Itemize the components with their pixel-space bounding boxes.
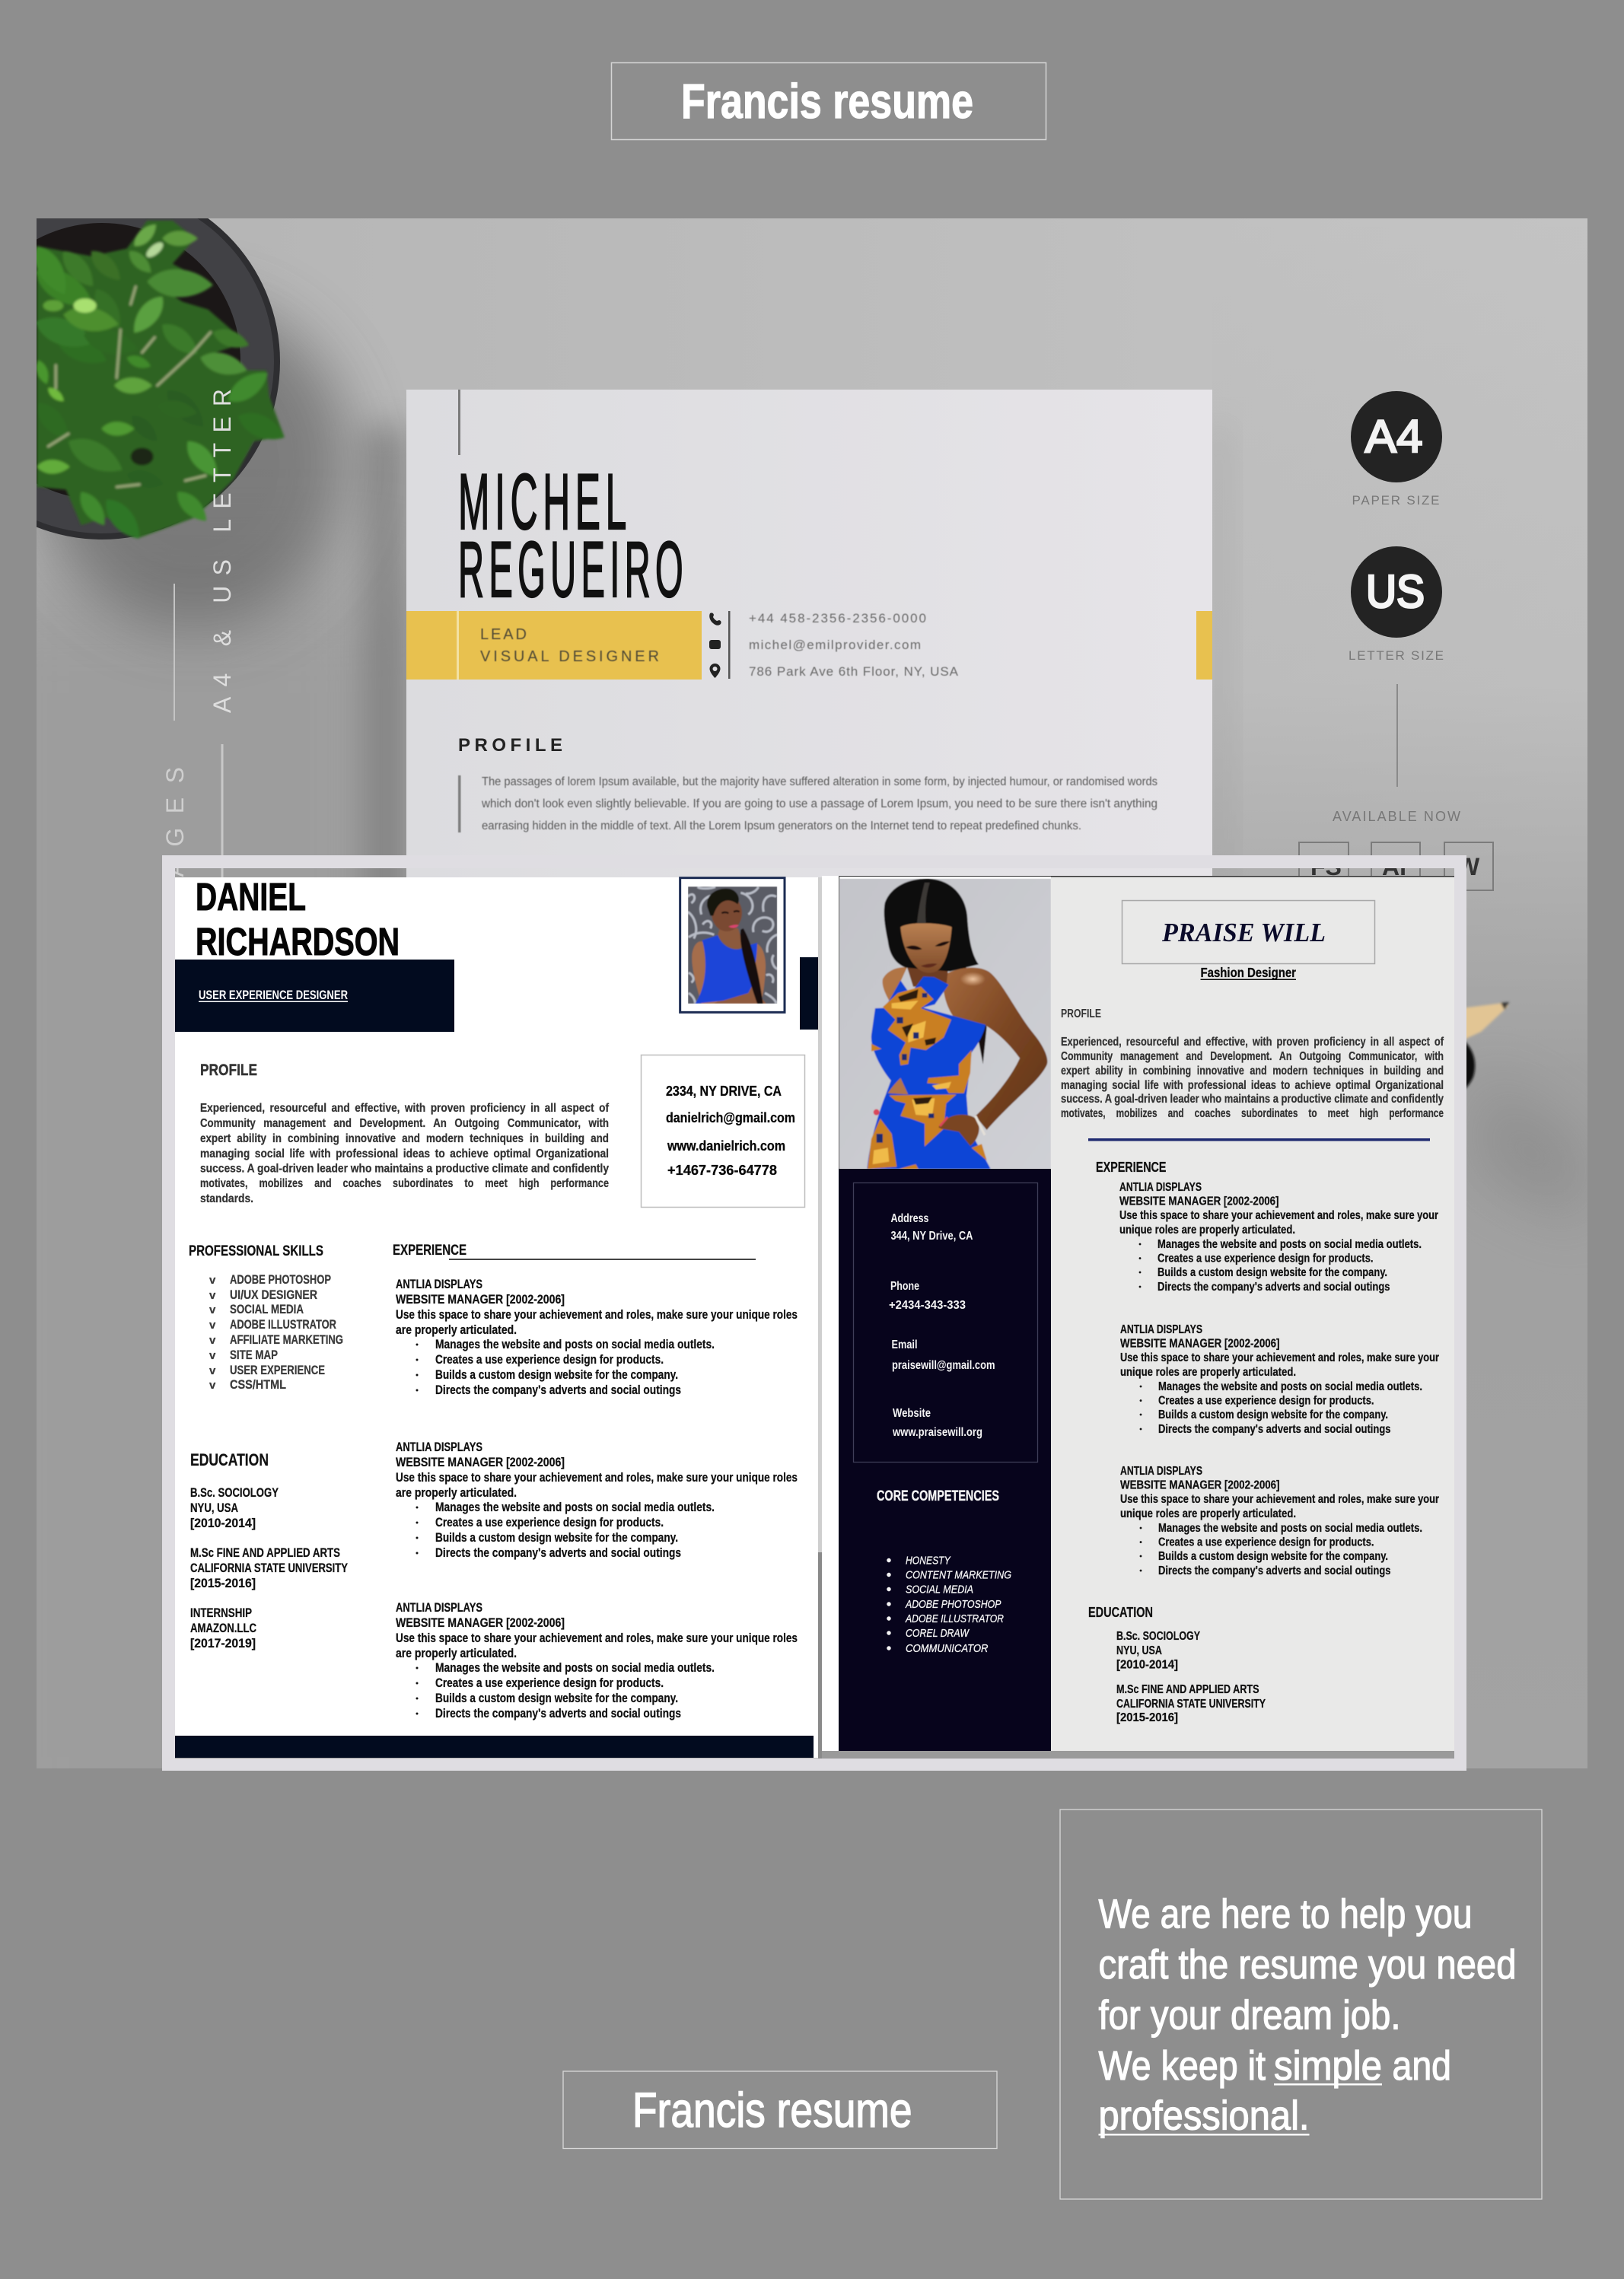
profile paragraph: motivates, mobilizes and coaches subordinates to meet high performance <box>1061 1107 1444 1120</box>
professional skills list: AFFILIATE MARKETING <box>230 1333 343 1347</box>
experience entry 1: Manages the website and posts on social media outlets. <box>1157 1238 1422 1251</box>
vertical caption: A4 & US LETTER: A4 & US LETTER <box>209 389 236 713</box>
experience entry 2: Manages the website and posts on social media outlets. <box>1158 1380 1422 1393</box>
sample name <box>460 473 682 598</box>
strip between resumes <box>818 876 1454 1759</box>
experience entry 1: Creates a use experience design for products. <box>435 1352 664 1367</box>
profile paragraph: success. A goal-driven leader who maintains a productive climate and confidently <box>1061 1093 1444 1106</box>
sidebar contact box: +2434-343-333 <box>889 1299 966 1312</box>
experience entry 3: Builds a custom design website for the company. <box>1158 1550 1388 1563</box>
education list: [2010-2014] <box>1116 1659 1178 1671</box>
experience entry 3: Use this space to share your achievement and roles, make sure your unique roles <box>396 1631 798 1645</box>
experience entry 3: Manages the website and posts on social media outlets. <box>1158 1522 1422 1535</box>
yellow job title band: LEAD <box>480 626 527 643</box>
core competencies list: ADOBE PHOTOSHOP <box>905 1598 1001 1611</box>
navy footer bar <box>175 1736 814 1758</box>
tagline box <box>1060 1810 1542 2199</box>
core competencies list: CONTENT MARKETING <box>906 1569 1011 1581</box>
core competencies list: CORE COMPETENCIES <box>877 1488 999 1504</box>
contact box: danielrich@gmail.com <box>666 1110 795 1125</box>
sample profile text: which don't look even slightly believable. If you are going to use a passage of Lorem Ipsum, you need to be sure there isn't anything <box>481 797 1157 810</box>
tagline box: and <box>1393 2043 1451 2089</box>
title box: Francis resume: Francis resume <box>681 74 973 129</box>
experience entry 1: WEBSITE MANAGER [2002-2006] <box>396 1292 565 1307</box>
mockup backdrop <box>0 218 1587 1872</box>
badge: A4 paper size: PAPER SIZE <box>1352 493 1440 508</box>
experience entry 3: ANTLIA DISPLAYS <box>1120 1465 1202 1478</box>
experience heading: EXPERIENCE <box>393 1242 467 1259</box>
education list: M.Sc FINE AND APPLIED ARTS <box>1116 1683 1259 1696</box>
core competencies list <box>877 1488 1011 1655</box>
experience entry 2: Creates a use experience design for products. <box>1158 1395 1374 1408</box>
software format boxes <box>1299 842 1493 890</box>
experience entry 2: Builds a custom design website for the company. <box>1158 1408 1388 1421</box>
education list: AMAZON.LLC <box>190 1621 256 1635</box>
education list: NYU, USA <box>1116 1644 1162 1657</box>
experience entry 3: Manages the website and posts on social media outlets. <box>435 1660 715 1675</box>
experience entry 3 <box>396 1600 798 1720</box>
experience entry 1 <box>396 1277 798 1397</box>
experience entry 1: Creates a use experience design for products. <box>1157 1252 1373 1265</box>
vertical rule right <box>221 744 224 877</box>
core competencies list: ADOBE ILLUSTRATOR <box>905 1612 1004 1625</box>
sidebar contact box: Email <box>892 1338 918 1351</box>
title box: Francis resume <box>612 62 1046 140</box>
experience entry 1: Use this space to share your achievement and roles, make sure your unique roles <box>396 1307 798 1322</box>
sidebar contact box: Phone <box>890 1280 919 1293</box>
experience entry 3: WEBSITE MANAGER [2002-2006] <box>396 1615 565 1630</box>
education list: [2017-2019] <box>190 1636 256 1650</box>
yellow job title band <box>406 611 1212 680</box>
experience entry 2 <box>396 1440 798 1560</box>
experience entry 1: Manages the website and posts on social media outlets. <box>435 1337 715 1351</box>
profile paragraph: expert ability in combining innovative and modern techniques in building and <box>200 1132 609 1145</box>
experience entry 3: ANTLIA DISPLAYS <box>396 1600 482 1615</box>
experience entry 1: ANTLIA DISPLAYS <box>396 1277 482 1291</box>
education list: CALIFORNIA STATE UNIVERSITY <box>1116 1698 1266 1711</box>
panel: resume Daniel Richardson <box>175 875 818 1758</box>
experience entry 3: are properly articulated. <box>396 1646 517 1660</box>
software format boxes: FS <box>1310 853 1342 880</box>
experience entry 1: are properly articulated. <box>396 1323 517 1337</box>
sample resume paper: Michel Regueiro: REGUEIRO <box>458 526 688 614</box>
experience entry 1: unique roles are properly articulated. <box>1119 1224 1295 1237</box>
experience entry 2: Directs the company's adverts and social outings <box>435 1545 681 1560</box>
experience entry 1 <box>1119 1181 1438 1294</box>
profile heading: PROFILE <box>1061 1007 1101 1020</box>
tagline box: professional. <box>1099 2093 1309 2138</box>
professional skills list: v <box>209 1349 216 1362</box>
education list: B.Sc. SOCIOLOGY <box>190 1485 279 1500</box>
experience entry 3: Builds a custom design website for the company. <box>435 1691 678 1705</box>
navy job title block <box>175 960 454 1032</box>
contact lines: 786 Park Ave 6th Floor, NY, USA <box>749 664 959 679</box>
core competencies list: COMMUNICATOR <box>906 1642 989 1655</box>
education list: NYU, USA <box>190 1501 238 1515</box>
experience entry 2: WEBSITE MANAGER [2002-2006] <box>1120 1338 1280 1351</box>
professional skills list: v <box>209 1334 216 1347</box>
vertical rule left <box>174 584 175 721</box>
profile paragraph: managing social life with professional ideas to achieve optimal Organizational <box>1061 1079 1444 1092</box>
profile paragraph: Experienced, resourceful and effective, with proven proficiency in all aspect of <box>200 1102 610 1115</box>
portrait photo <box>680 878 785 1012</box>
professional skills list: UI/UX DESIGNER <box>230 1288 317 1302</box>
contact box: www.danielrich.com <box>667 1138 785 1154</box>
experience entry 2: ANTLIA DISPLAYS <box>1120 1323 1202 1336</box>
contact lines: michel@emilprovider.com <box>749 638 921 652</box>
experience entry 2: Directs the company's adverts and social outings <box>1158 1423 1391 1436</box>
professional skills list: SOCIAL MEDIA <box>230 1303 304 1316</box>
navy sidebar <box>839 1169 1051 1751</box>
tagline box: craft the resume you need <box>1099 1942 1516 1988</box>
experience entry 2: Builds a custom design website for the company. <box>435 1530 678 1545</box>
experience entry 1: Builds a custom design website for the company. <box>1157 1266 1387 1279</box>
navy side tab <box>800 957 818 1030</box>
contact lines: +44 458-2356-2356-0000 <box>749 611 926 625</box>
name box <box>1122 901 1374 963</box>
profile paragraph: expert ability in combining innovative and modern techniques in building and <box>1061 1065 1444 1077</box>
tagline box: simple <box>1274 2043 1382 2089</box>
professional skills list: v <box>209 1319 216 1332</box>
experience entry 1: Builds a custom design website for the company. <box>435 1367 678 1382</box>
professional skills list: v <box>209 1379 216 1392</box>
experience entry 3: Use this space to share your achievement and roles, make sure your <box>1120 1493 1439 1506</box>
experience entry 3: Creates a use experience design for products. <box>1158 1536 1374 1549</box>
experience entry 1: Directs the company's adverts and social outings <box>435 1383 681 1397</box>
education list <box>1088 1605 1266 1724</box>
profile paragraph: Experienced, resourceful and effective, with proven proficiency in all aspect of <box>1061 1036 1444 1049</box>
education list: [2015-2016] <box>1116 1711 1178 1724</box>
tagline box: for your dream job. <box>1099 1992 1400 2038</box>
experience entry 2 <box>1120 1323 1439 1436</box>
sidebar contact box: Address <box>890 1212 928 1225</box>
footer label box: Francis resume: Francis resume <box>632 2083 912 2137</box>
job title: Fashion Designer <box>1201 965 1296 980</box>
badge divider <box>1396 684 1398 787</box>
education list: EDUCATION <box>1088 1605 1153 1620</box>
sidebar contact box: praisewill@gmail.com <box>892 1359 995 1372</box>
contact box: 2334, NY DRIVE, CA <box>666 1084 782 1099</box>
education list: B.Sc. SOCIOLOGY <box>1116 1630 1200 1643</box>
professional skills list: SITE MAP <box>230 1348 278 1362</box>
professional skills list: CSS/HTML <box>230 1378 286 1392</box>
experience entry 2: Use this space to share your achievement and roles, make sure your <box>1120 1351 1439 1364</box>
profile paragraph: standards. <box>200 1192 253 1205</box>
experience entry 3: Directs the company's adverts and social outings <box>1158 1564 1391 1577</box>
profile paragraph: managing social life with professional ideas to achieve optimal Organizational <box>200 1147 609 1160</box>
experience entry 2: are properly articulated. <box>396 1485 517 1500</box>
yellow job title band: VISUAL DESIGNER <box>480 648 659 665</box>
experience entry 3: Creates a use experience design for products. <box>435 1676 664 1690</box>
badge: US letter size <box>1349 546 1444 663</box>
education list: EDUCATION <box>190 1450 269 1469</box>
blue divider <box>1088 1138 1430 1141</box>
education list <box>190 1450 349 1650</box>
contact box <box>641 1055 805 1207</box>
core competencies list: HONESTY <box>906 1554 951 1568</box>
light overlay frame behind resumes <box>162 855 1466 1771</box>
professional skills list: v <box>209 1274 216 1287</box>
profile paragraph <box>200 1102 610 1205</box>
professional skills list: ADOBE ILLUSTRATOR <box>230 1318 336 1332</box>
experience entry 3 <box>1120 1465 1439 1577</box>
experience entry 2: unique roles are properly articulated. <box>1120 1366 1296 1379</box>
badge: A4 paper size: A4 <box>1365 411 1423 462</box>
experience entry 2: Use this space to share your achievement and roles, make sure your unique roles <box>396 1470 798 1485</box>
sample profile text: earrasing hidden in the middle of text. All the Lorem Ipsum generators on the Internet tend to repeat predefined chunks. <box>482 820 1081 832</box>
navy job title block: USER EXPERIENCE DESIGNER <box>199 988 348 1002</box>
name box: PRAISE WILL <box>1161 918 1326 947</box>
experience entry 2: WEBSITE MANAGER [2002-2006] <box>396 1455 565 1469</box>
software format boxes: AI <box>1382 853 1406 880</box>
professional skills list: PROFESSIONAL SKILLS <box>189 1243 323 1259</box>
experience entry 3: unique roles are properly articulated. <box>1120 1507 1296 1520</box>
badge: US letter size: LETTER SIZE <box>1349 648 1444 663</box>
footer label box: Francis resume <box>563 2071 997 2149</box>
professional skills list: v <box>209 1303 216 1316</box>
experience entry 1: WEBSITE MANAGER [2002-2006] <box>1119 1195 1279 1208</box>
name: DANIEL <box>196 875 306 918</box>
education list: INTERNSHIP <box>190 1606 252 1620</box>
fashion photo <box>839 879 1051 1169</box>
profile paragraph: Community management and Development. An Outgoing Communicator, with <box>200 1117 609 1130</box>
badge: A4 paper size <box>1351 391 1442 508</box>
professional skills list: ADOBE PHOTOSHOP <box>230 1273 331 1287</box>
experience heading: EXPERIENCE <box>1096 1160 1166 1175</box>
sample name: MICHEL <box>458 458 632 546</box>
experience entry 1: ANTLIA DISPLAYS <box>1119 1181 1202 1194</box>
experience entry 2: Creates a use experience design for products. <box>435 1515 664 1529</box>
education list: [2010-2014] <box>190 1516 256 1530</box>
sample resume paper: Michel Regueiro <box>406 390 1212 892</box>
experience entry 1: Directs the company's adverts and social outings <box>1157 1281 1390 1294</box>
profile paragraph: success. A goal-driven leader who maintains a productive climate and confidently <box>200 1163 609 1175</box>
experience entry 3: WEBSITE MANAGER [2002-2006] <box>1120 1479 1280 1492</box>
name: RICHARDSON <box>196 920 400 963</box>
core competencies list: SOCIAL MEDIA <box>906 1583 973 1596</box>
sample profile text: The passages of lorem Ipsum available, but the majority have suffered alteration in some form, by injected humour, or randomised words <box>482 775 1157 788</box>
core competencies list: COREL DRAW <box>906 1627 970 1640</box>
professional skills list <box>189 1243 343 1392</box>
panel: resume mockup photo <box>37 218 1587 1768</box>
pencil tip <box>1461 1002 1509 1092</box>
profile paragraph: motivates, mobilizes and coaches subordinates to meet high performance <box>200 1177 609 1190</box>
vertical caption: PAGES: PAGES <box>161 767 189 906</box>
sidebar contact box: Website <box>893 1407 931 1420</box>
sidebar contact box <box>854 1182 1038 1463</box>
sample profile text <box>458 775 1157 832</box>
sidebar contact box: 344, NY Drive, CA <box>890 1230 973 1243</box>
education list: M.Sc FINE AND APPLIED ARTS <box>190 1545 340 1560</box>
sidebar contact box: www.praisewill.org <box>892 1426 982 1439</box>
plant leaves <box>27 220 289 546</box>
experience entry 1: Use this space to share your achievement and roles, make sure your <box>1119 1209 1438 1222</box>
contact lines <box>749 611 959 679</box>
education list: [2015-2016] <box>190 1576 256 1590</box>
profile heading: PROFILE <box>200 1062 257 1079</box>
plant pot <box>37 218 280 540</box>
contact box: +1467-736-64778 <box>667 1163 777 1178</box>
profile paragraph <box>1061 1036 1444 1120</box>
professional skills list: v <box>209 1289 216 1302</box>
profile paragraph: Community management and Development. An Outgoing Communicator, with <box>1061 1050 1444 1063</box>
professional skills list: v <box>209 1364 216 1377</box>
badge: US letter size: US <box>1366 566 1425 617</box>
name <box>196 875 400 963</box>
experience entry 2: ANTLIA DISPLAYS <box>396 1440 482 1454</box>
sample profile heading: PROFILE <box>458 735 562 756</box>
education list: CALIFORNIA STATE UNIVERSITY <box>190 1561 349 1575</box>
available now label: AVAILABLE NOW <box>1333 809 1460 824</box>
tagline box: We keep it <box>1099 2043 1266 2089</box>
software format boxes: W <box>1457 853 1480 880</box>
tagline box: We are here to help you <box>1099 1892 1472 1937</box>
panel: resume Praise Will <box>839 876 1454 1751</box>
experience entry 2: Manages the website and posts on social media outlets. <box>435 1500 715 1514</box>
contact icons <box>709 611 731 679</box>
professional skills list: USER EXPERIENCE <box>230 1364 325 1377</box>
experience entry 3: Directs the company's adverts and social outings <box>435 1706 681 1720</box>
